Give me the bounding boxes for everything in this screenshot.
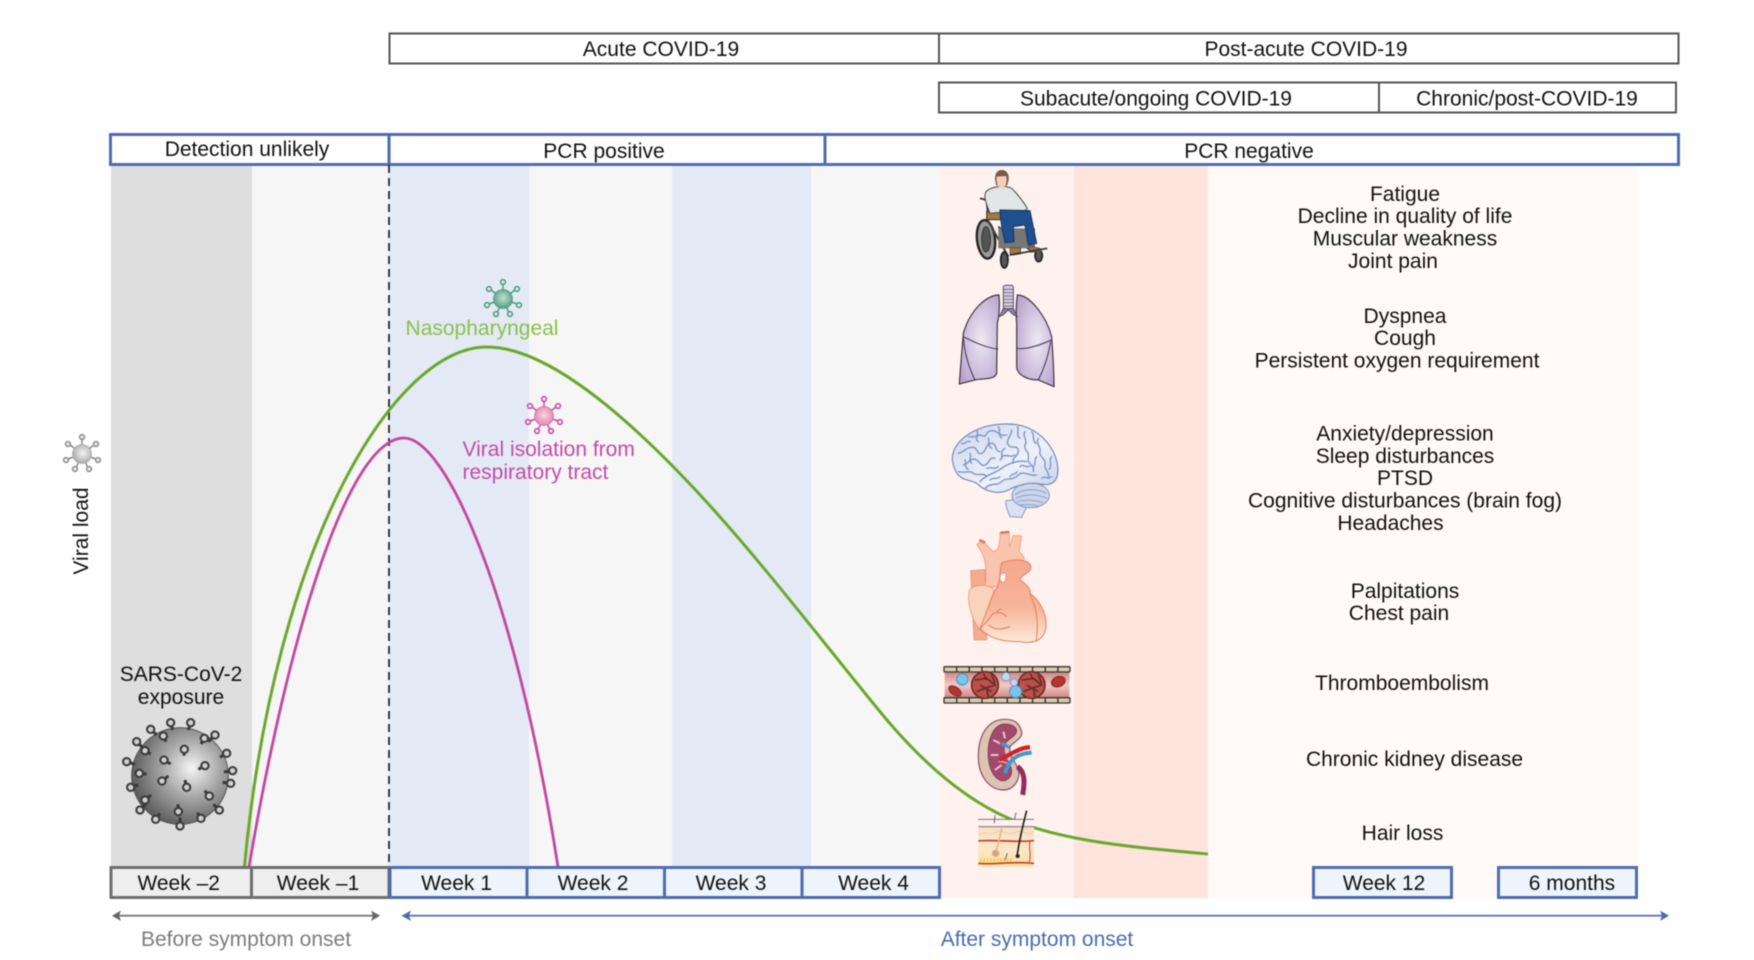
symptoms: cardiac (1349, 580, 1459, 625)
icon: skin and hair follicle (978, 811, 1034, 867)
label: after symptom onset: After symptom onset (941, 928, 1133, 951)
header: PCR detection (110, 134, 1678, 165)
label: before symptom onset: Before symptom onset (141, 928, 351, 951)
background week bands (111, 165, 1637, 898)
header: subacute and chronic COVID-19: Chronic/post-COVID-19 (1416, 88, 1638, 110)
header: PCR detection: Detection unlikely (165, 138, 330, 161)
timeline: weeks 1 to 4: Week 4 (838, 872, 909, 895)
symptoms: respiratory: Dyspnea (1364, 305, 1447, 328)
label: nasopharyngeal: Nasopharyngeal (406, 317, 558, 340)
icon: respiratory virus (526, 397, 562, 433)
curve: viral isolation from respiratory tract (249, 438, 558, 867)
symptom: thromboembolism: Thromboembolism (1315, 672, 1489, 695)
symptoms: general: Fatigue (1370, 183, 1440, 206)
symptom: hair loss: Hair loss (1362, 822, 1443, 845)
symptoms: general (1298, 183, 1512, 273)
timeline: week 12 (1314, 868, 1452, 898)
label: viral isolation: respiratory tract (462, 461, 609, 484)
timeline: 6 months: 6 months (1529, 872, 1615, 895)
symptoms: general: Joint pain (1348, 250, 1438, 273)
y axis label: Viral load (70, 487, 93, 575)
symptom onset dashed line (388, 165, 390, 867)
arrow: before symptom onset (112, 910, 380, 921)
header: acute and post-acute COVID-19: Acute COVID-19 (583, 38, 739, 61)
symptom: kidney: Chronic kidney disease (1306, 748, 1523, 771)
label: viral isolation: Viral isolation from (462, 438, 635, 461)
symptoms: cardiac: Palpitations (1351, 580, 1459, 603)
icon: lungs (959, 285, 1054, 387)
symptoms: neuropsychiatric (1248, 422, 1562, 535)
icon: nasopharyngeal virus (485, 280, 521, 316)
icon: blood vessel with clots (944, 667, 1070, 703)
header: acute and post-acute COVID-19: Post-acute COVID-19 (1204, 38, 1408, 61)
timeline: weeks before symptom onset (111, 867, 389, 898)
symptoms: neuropsychiatric: PTSD (1377, 467, 1433, 490)
label: SARS-CoV-2 exposure: exposure (138, 686, 224, 709)
timeline: 6 months (1498, 868, 1636, 898)
icon: person in wheelchair (975, 170, 1047, 268)
timeline: weeks before symptom onset: Week –2 (137, 872, 220, 895)
symptoms: neuropsychiatric: Anxiety/depression (1316, 422, 1494, 446)
header: PCR detection: PCR negative (1184, 140, 1314, 163)
icon: kidney (978, 719, 1032, 795)
symptoms: neuropsychiatric: Headaches (1337, 512, 1444, 535)
timeline: weeks 1 to 4 (390, 867, 940, 898)
header: acute and post-acute COVID-19 (390, 33, 1678, 64)
icon: viral load virus (64, 435, 100, 471)
arrow: after symptom onset (402, 910, 1669, 921)
timeline: weeks before symptom onset: Week –1 (277, 872, 359, 895)
symptoms: neuropsychiatric: Cognitive disturbances (brain fog) (1248, 490, 1562, 512)
symptoms: respiratory: Cough (1374, 327, 1436, 350)
icon: brain (952, 424, 1058, 517)
timeline: weeks 1 to 4: Week 1 (421, 872, 492, 895)
symptoms: neuropsychiatric: Sleep disturbances (1316, 445, 1494, 468)
symptoms: respiratory: Persistent oxygen requirement (1255, 350, 1540, 372)
header: subacute and chronic COVID-19: Subacute/ongoing COVID-19 (1020, 88, 1292, 110)
timeline: weeks 1 to 4: Week 2 (558, 872, 628, 895)
symptoms: respiratory (1255, 305, 1540, 372)
timeline: weeks 1 to 4: Week 3 (696, 872, 766, 895)
icon: SARS-CoV-2 particle (123, 719, 236, 830)
curve: nasopharyngeal viral load (244, 347, 1208, 867)
header: subacute and chronic COVID-19 (939, 82, 1676, 113)
header: PCR detection: PCR positive (543, 140, 665, 163)
icon: heart (969, 532, 1046, 642)
symptoms: general: Muscular weakness (1313, 228, 1497, 250)
symptoms: cardiac: Chest pain (1349, 602, 1449, 625)
label: SARS-CoV-2 exposure (120, 663, 242, 709)
label: viral isolation (462, 438, 635, 484)
timeline: week 12: Week 12 (1343, 872, 1425, 895)
symptoms: general: Decline in quality of life (1298, 205, 1512, 228)
label: SARS-CoV-2 exposure: SARS-CoV-2 (120, 663, 242, 686)
